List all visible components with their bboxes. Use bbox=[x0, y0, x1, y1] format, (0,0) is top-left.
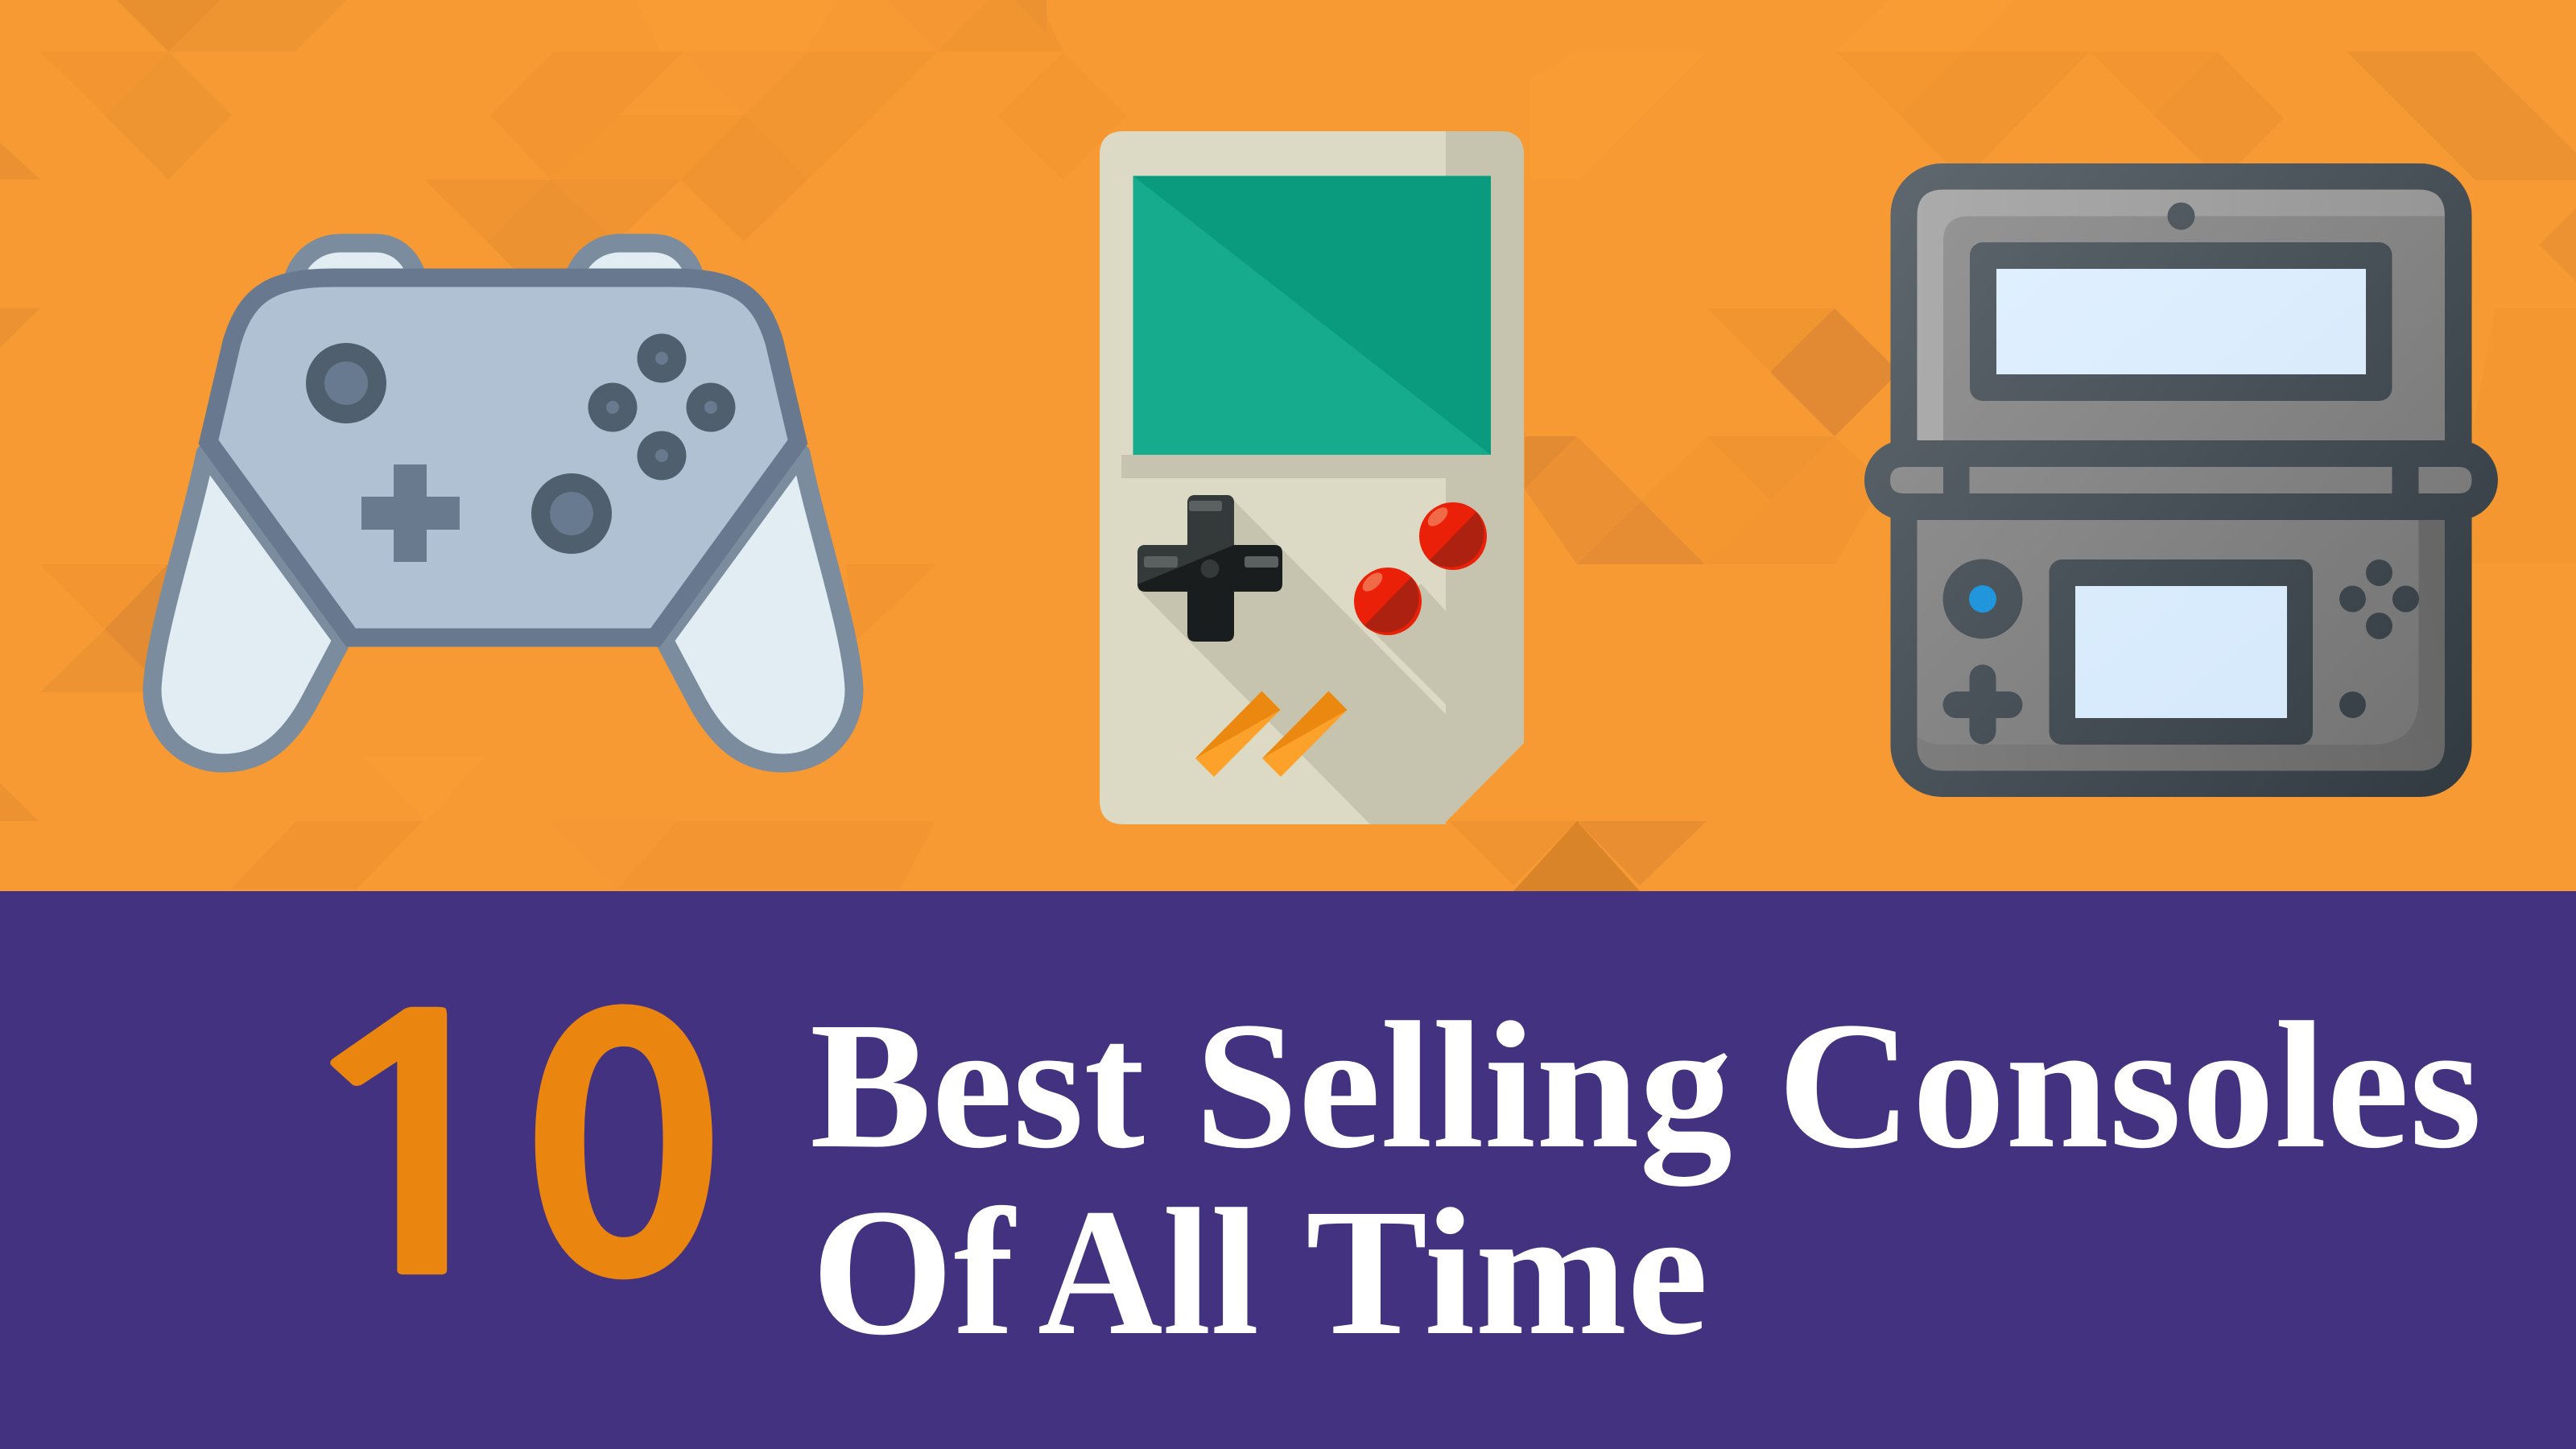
title line 1: Best bbox=[810, 985, 1145, 1186]
number 10: 0 bbox=[520, 848, 728, 1381]
panel: orange background bbox=[0, 0, 2576, 891]
title line 1: Selling bbox=[1195, 985, 1732, 1187]
top screen bbox=[1970, 242, 2392, 401]
start and select buttons bbox=[1195, 691, 1348, 777]
number 10: 1 bbox=[270, 978, 553, 1327]
bottom screen bbox=[2050, 559, 2313, 745]
start button bbox=[2339, 691, 2366, 718]
left shoulder bumper bbox=[293, 243, 418, 279]
right grip bbox=[664, 453, 854, 763]
icon: dual-screen folding handheld bbox=[1864, 163, 2498, 797]
right shoulder bumper bbox=[573, 243, 696, 279]
title heading bbox=[810, 985, 2482, 1373]
icon: handheld retro console bbox=[1100, 131, 1524, 824]
d-pad long shadow bbox=[1137, 501, 1446, 824]
hinge bbox=[1864, 440, 2498, 520]
cross pad bbox=[1137, 495, 1282, 642]
right side shade bbox=[1443, 131, 1524, 824]
face buttons bbox=[2339, 559, 2419, 639]
controller body bbox=[208, 278, 798, 638]
title line 2: Of bbox=[811, 1171, 1017, 1373]
left analog stick bbox=[306, 343, 386, 423]
lower deck bbox=[1918, 520, 2445, 771]
face buttons bbox=[588, 333, 736, 480]
red button left bbox=[1354, 568, 1422, 635]
camera bbox=[2167, 203, 2194, 230]
screen ledge bbox=[1121, 455, 1446, 478]
title line 1: Consoles bbox=[1777, 985, 2482, 1186]
circle pad bbox=[1943, 559, 2022, 639]
icon: pro game controller bbox=[152, 243, 854, 763]
upper lid bbox=[1918, 190, 2445, 440]
screen bbox=[1133, 175, 1491, 455]
red button right bbox=[1419, 502, 1487, 570]
title line 2: All bbox=[1038, 1171, 1259, 1373]
console body bbox=[1100, 131, 1524, 824]
button long shadow bbox=[1375, 584, 1446, 704]
right analog stick bbox=[531, 473, 612, 554]
number 10 bbox=[270, 848, 728, 1381]
title line 2: Time bbox=[1306, 1171, 1708, 1373]
left grip bbox=[152, 453, 342, 763]
panel: purple title band bbox=[0, 891, 2576, 1449]
d-pad bbox=[1956, 678, 2009, 731]
outer casing bbox=[1890, 163, 2471, 797]
d-pad bbox=[361, 464, 460, 562]
